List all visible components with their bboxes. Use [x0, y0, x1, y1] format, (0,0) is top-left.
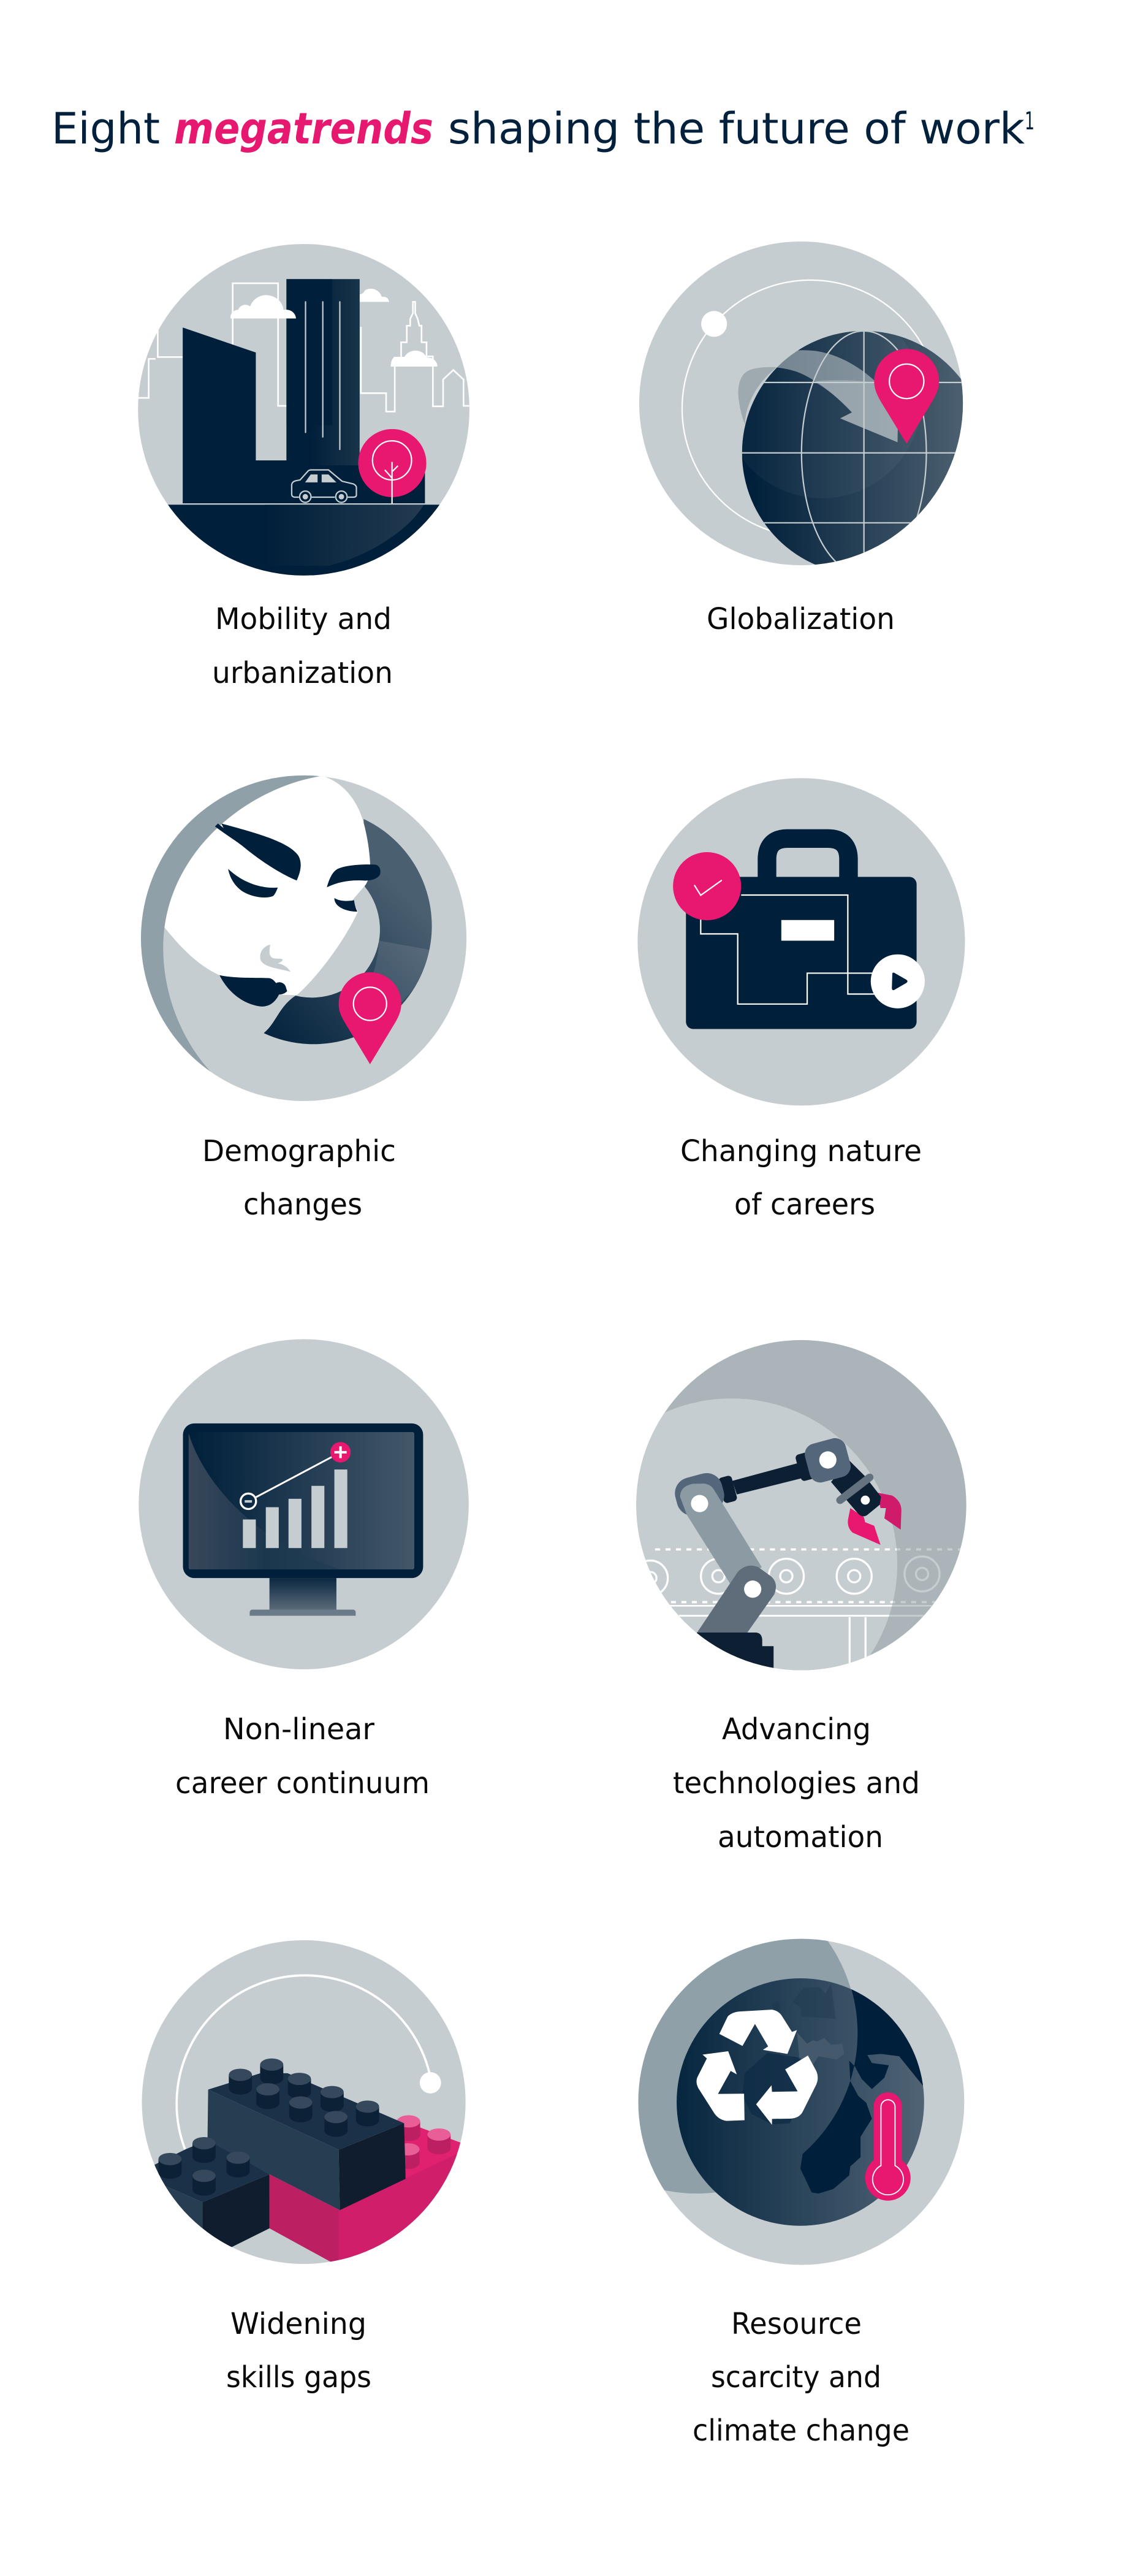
- label: Demographic: [202, 1134, 396, 1168]
- icon: robot arm on conveyor: [636, 1340, 966, 1670]
- title: [51, 104, 1035, 154]
- title: megatrends: [174, 104, 433, 154]
- label: [226, 2307, 371, 2395]
- robot claws: [848, 1493, 902, 1545]
- label: [673, 1712, 920, 1854]
- title: Eight: [51, 104, 160, 154]
- label: Changing nature: [680, 1134, 922, 1168]
- label: [680, 1134, 922, 1222]
- conveyor: [646, 1549, 960, 1663]
- icon: building bricks: [142, 1940, 469, 2266]
- panel: resource scarcity and climate change: [639, 1938, 965, 2447]
- label: [202, 1134, 396, 1222]
- icon: map pin: [339, 972, 401, 1064]
- icon: face: [129, 773, 466, 1107]
- panel: globalization: [639, 242, 963, 630]
- trend line: [241, 1442, 351, 1509]
- icon: tree: [358, 429, 427, 503]
- panel: changing nature of careers: [637, 778, 965, 1222]
- title: shaping the future of work: [448, 104, 1025, 154]
- label: Resource: [731, 2307, 862, 2341]
- icon: map pin: [874, 349, 939, 444]
- label: career continuum: [175, 1766, 430, 1801]
- arrow: swoosh: [739, 350, 898, 442]
- label: climate change: [693, 2414, 909, 2448]
- icon: thermometer: [865, 2092, 911, 2201]
- panel: advancing technologies and automation: [636, 1340, 966, 1848]
- bar chart: [243, 1469, 347, 1548]
- label: urbanization: [212, 656, 393, 690]
- label: scarcity and: [711, 2360, 881, 2395]
- label: [212, 602, 393, 690]
- label: changes: [243, 1187, 362, 1222]
- label: of careers: [734, 1187, 875, 1222]
- panel: widening skills gaps: [142, 1940, 469, 2395]
- label: Globalization: [707, 602, 895, 636]
- label: Mobility and: [215, 602, 392, 636]
- panel: mobility and urbanization: [129, 244, 483, 690]
- icon: check badge: [673, 852, 741, 920]
- label: [175, 1712, 430, 1801]
- label: Non-linear: [223, 1712, 374, 1747]
- icon: play button: [871, 955, 925, 1008]
- icon: car: [292, 470, 357, 502]
- icon: globe with pin: [639, 242, 963, 565]
- label: technologies and: [673, 1766, 920, 1801]
- icon: briefcase: [637, 778, 965, 1105]
- robot arm: [666, 1436, 881, 1672]
- small dark brick: [154, 2137, 270, 2247]
- pink brick: [270, 2115, 469, 2266]
- icon: recycling arrows: [696, 2010, 818, 2125]
- label: skills gaps: [226, 2360, 371, 2395]
- panel: demographic changes: [129, 773, 466, 1222]
- icon: earth with recycling symbol: [639, 1938, 965, 2265]
- label: automation: [718, 1820, 883, 1854]
- large dark brick: [208, 2059, 406, 2210]
- title: 1: [1025, 107, 1035, 135]
- label: Widening: [230, 2307, 366, 2341]
- panel: non-linear career continuum: [139, 1339, 469, 1801]
- label: [693, 2307, 909, 2448]
- icon: city skyline: [129, 244, 483, 582]
- icon: monitor with chart: [139, 1339, 469, 1669]
- label: Advancing: [722, 1712, 871, 1747]
